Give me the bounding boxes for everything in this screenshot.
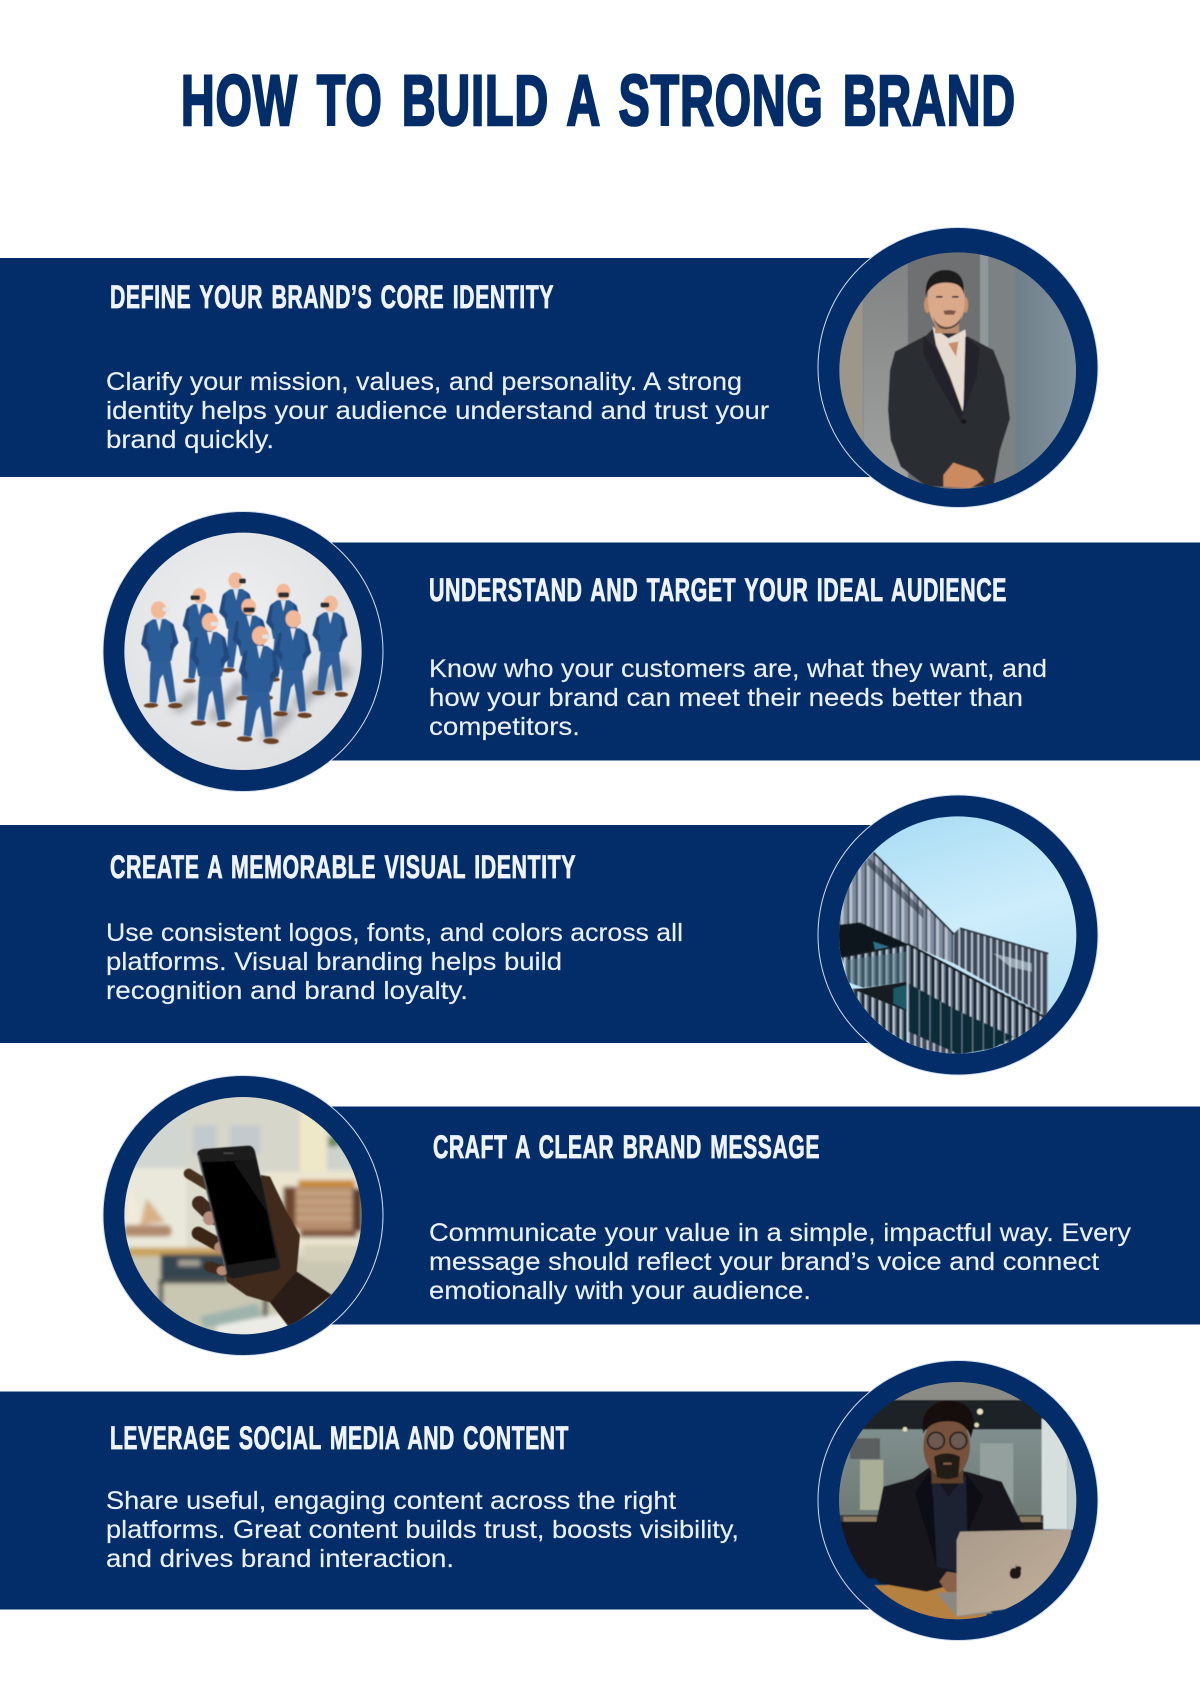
body text: Know who your customers are, what they want, and (429, 655, 1047, 683)
circle frame (103, 1076, 383, 1356)
photo: hand holding a smartphone (120, 1092, 367, 1338)
body text (106, 368, 769, 454)
heading: LEVERAGE SOCIAL MEDIA AND CONTENT (110, 1420, 569, 1456)
body text: Use consistent logos, fonts, and colors across all (106, 919, 683, 947)
circle frame (818, 795, 1098, 1075)
photo: man with glasses at a laptop (837, 1380, 1081, 1623)
band (0, 825, 900, 1043)
body text: identity helps your audience understand and trust your (106, 397, 769, 425)
panel: craft a clear brand message (103, 1076, 1200, 1356)
panel: understand and target your ideal audience (103, 512, 1200, 792)
panel: leverage social media and content (0, 1360, 1098, 1640)
band (0, 258, 900, 477)
band (300, 542, 1200, 760)
heading: CREATE A MEMORABLE VISUAL IDENTITY (110, 849, 576, 885)
body text (429, 655, 1047, 741)
body text: emotionally with your audience. (429, 1277, 811, 1305)
heading: CRAFT A CLEAR BRAND MESSAGE (433, 1129, 820, 1165)
body text: platforms. Great content builds trust, boosts visibility, (106, 1516, 739, 1544)
body text: platforms. Visual branding helps build (106, 948, 562, 976)
body text: Communicate your value in a simple, impactful way. Every (429, 1219, 1132, 1247)
body text: message should reflect your brand’s voice and connect (429, 1248, 1099, 1276)
body text: recognition and brand loyalty. (106, 977, 468, 1005)
body text: Share useful, engaging content across the right (106, 1487, 676, 1515)
panel: define your brand's core identity (0, 228, 1098, 508)
circle frame (103, 512, 383, 792)
photo: group of men in blue suits (123, 532, 363, 772)
circle frame (818, 228, 1098, 508)
body text: competitors. (429, 713, 580, 741)
body text: brand quickly. (106, 426, 274, 454)
body text (106, 1487, 739, 1573)
circle frame (818, 1360, 1098, 1640)
band (300, 1106, 1200, 1324)
photo: businessman in dark suit (837, 250, 1079, 493)
photo: modern building against sky (837, 815, 1080, 1062)
band (0, 1392, 900, 1610)
body text: how your brand can meet their needs better than (429, 684, 1023, 712)
body text: and drives brand interaction. (106, 1545, 454, 1573)
panel: create a memorable visual identity (0, 795, 1098, 1075)
body text: Clarify your mission, values, and personality. A strong (106, 368, 742, 396)
body text (106, 919, 683, 1005)
heading: DEFINE YOUR BRAND’S CORE IDENTITY (110, 279, 554, 315)
body text (429, 1219, 1132, 1305)
